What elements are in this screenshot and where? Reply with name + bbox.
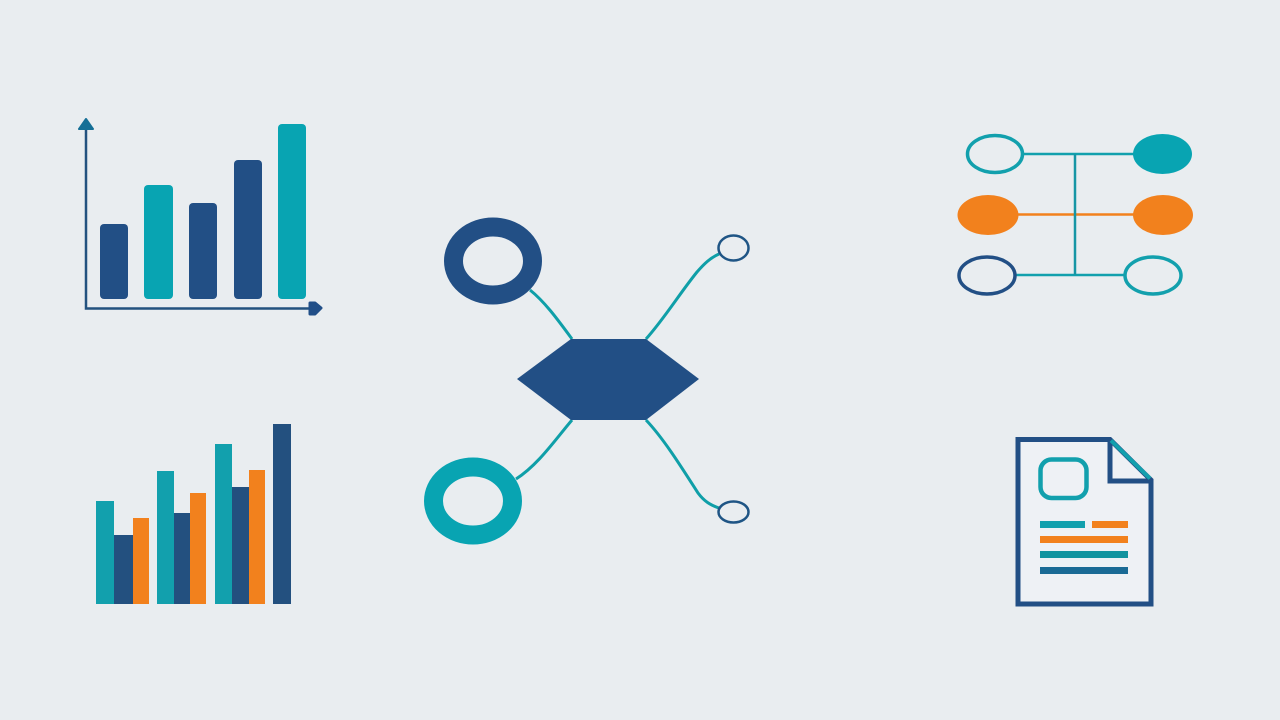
bar 1 xyxy=(100,224,128,299)
flow diagram: connected ovals xyxy=(958,134,1193,294)
document page xyxy=(1018,440,1151,604)
connector lines: teal rows xyxy=(1016,154,1134,275)
connector: upper left xyxy=(530,290,572,339)
bar 3 xyxy=(189,203,217,299)
fold edge xyxy=(1111,440,1150,478)
node: navy ring xyxy=(454,227,532,295)
text line: teal long xyxy=(1040,551,1128,558)
bar 5 xyxy=(278,124,306,299)
text line: orange short xyxy=(1092,521,1128,528)
chart: single series bar chart with axes xyxy=(79,119,321,314)
text line: blue long xyxy=(1040,567,1128,574)
node: small lower circle xyxy=(718,502,748,522)
icon: document xyxy=(1018,440,1151,604)
connector: upper right xyxy=(646,254,719,339)
connector: lower left xyxy=(516,420,572,479)
image placeholder xyxy=(1040,460,1086,498)
oval: bottom left xyxy=(959,257,1015,294)
oval: middle left xyxy=(958,195,1018,235)
text line: orange long xyxy=(1040,536,1128,543)
arrow: horizontal axis head xyxy=(310,303,321,314)
oval: middle right xyxy=(1133,195,1193,235)
folded corner xyxy=(1110,441,1149,481)
oval: top left xyxy=(968,136,1022,172)
oval: bottom right xyxy=(1125,257,1181,294)
connector: lower right xyxy=(646,420,719,508)
node: small upper circle xyxy=(718,236,748,260)
node: teal ring xyxy=(434,467,512,535)
connector line: vertical trunk xyxy=(1074,154,1076,275)
chart axes xyxy=(86,128,312,308)
chart: grouped bar chart xyxy=(96,424,291,604)
oval: top right xyxy=(1133,134,1192,174)
text line: teal short xyxy=(1040,521,1085,528)
arrow: vertical axis head xyxy=(79,119,93,129)
bar 4 xyxy=(234,160,262,299)
central hub network diagram xyxy=(434,227,748,535)
bar 2 xyxy=(144,185,173,299)
hexagon hub xyxy=(517,339,699,420)
connector line: orange row xyxy=(1018,213,1134,216)
